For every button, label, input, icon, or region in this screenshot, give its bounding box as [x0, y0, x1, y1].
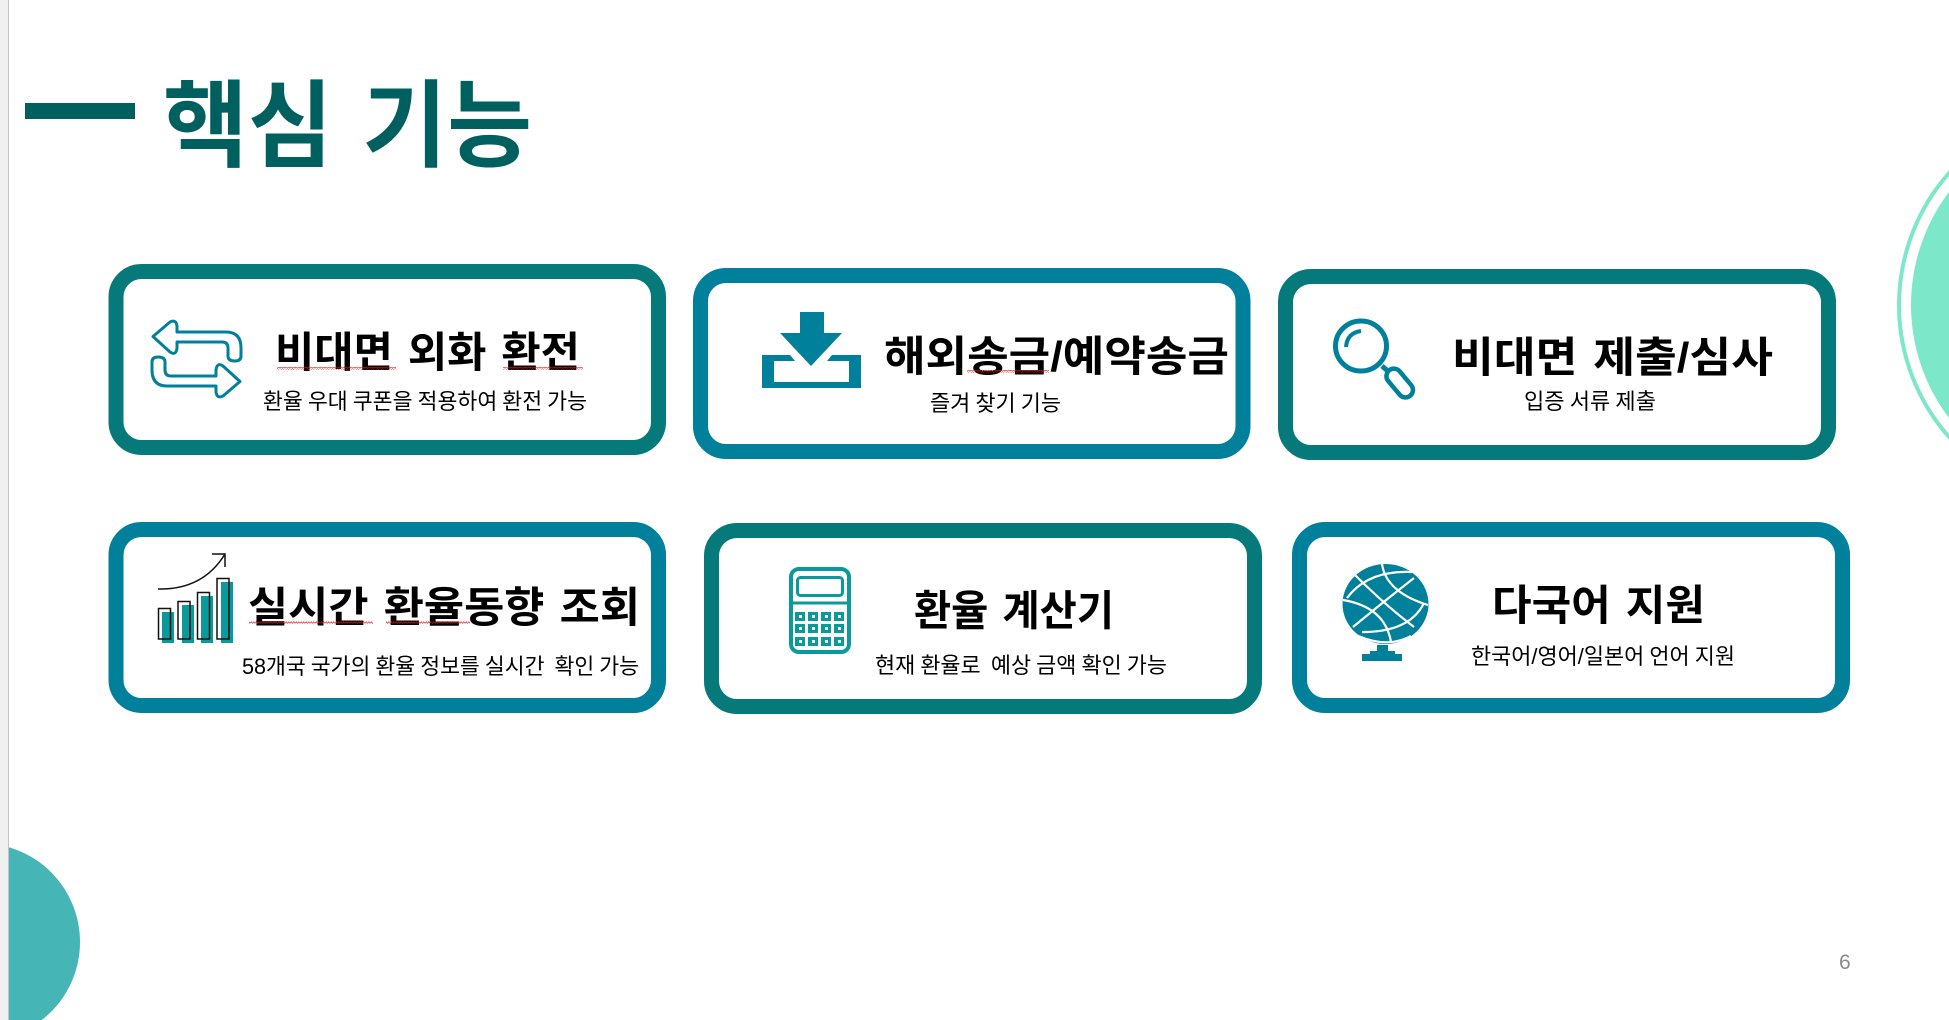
description: 현재 환율로 예상 금액 확인 가능	[875, 653, 1167, 678]
panel: 비대면 외화 환전	[116, 272, 658, 448]
description: 58개국 국가의 환율 정보를 실시간 확인 가능	[242, 654, 639, 679]
description: 환율 우대 쿠폰을 적용하여 환전 가능	[263, 389, 587, 414]
description: 즐겨 찾기 기능	[930, 391, 1061, 416]
description: 한국어/영어/일본어 언어 지원	[1471, 644, 1735, 669]
icon: rising bar chart	[158, 554, 233, 643]
icon: magnifier	[1336, 321, 1416, 401]
spell-check underline	[277, 367, 583, 370]
panel: 환율 계산기	[712, 530, 1254, 706]
heading: 다국어 지원	[1492, 582, 1705, 629]
panel: 비대면 제출/심사	[1286, 276, 1828, 452]
icon: globe	[1342, 564, 1428, 661]
title dash	[25, 103, 135, 119]
page number: 6	[1839, 951, 1851, 974]
title: 핵심 기능	[163, 74, 532, 180]
icon: calculator	[791, 569, 849, 652]
panel: 다국어 지원	[1300, 530, 1842, 706]
heading: 환율 계산기	[914, 588, 1114, 634]
icon: download tray	[762, 312, 861, 388]
icon: exchange arrows	[152, 321, 241, 397]
heading: 비대면 제출/심사	[1452, 334, 1773, 381]
spell-check underline	[249, 621, 470, 624]
spell-check underline	[967, 370, 1049, 373]
decorative circle: right with ring	[1899, 106, 1949, 504]
decorative circle: bottom left	[0, 843, 80, 1020]
heading: 실시간 환율동향 조회	[248, 584, 640, 631]
application side strip	[0, 0, 9, 1020]
description: 입증 서류 제출	[1524, 389, 1656, 414]
heading: 비대면 외화 환전	[275, 329, 580, 376]
panel: 실시간 환율동향 조회	[116, 530, 658, 706]
panel: 해외송금/예약송금	[700, 276, 1243, 452]
heading: 해외송금/예약송금	[884, 333, 1229, 380]
